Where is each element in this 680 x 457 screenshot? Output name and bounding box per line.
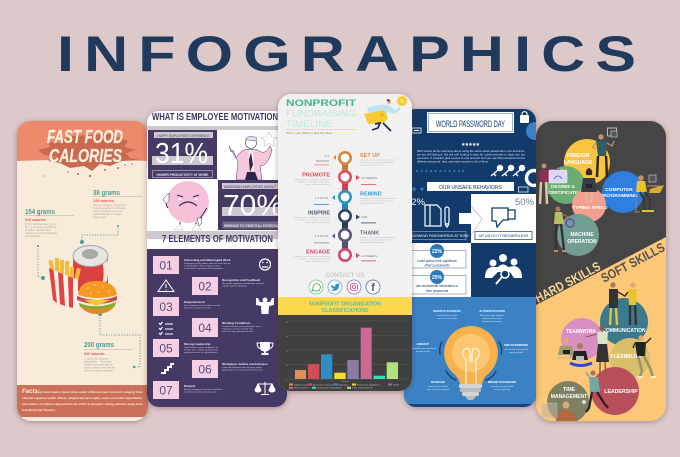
step: engage: Integrate your social presentations to bbox=[294, 255, 331, 258]
stat: 200 grams: saturated fat... The burger bbox=[84, 360, 112, 364]
blue section: password tips: Enter your login together bbox=[480, 314, 504, 317]
caption box left: KNOWING PASSWORDS AT RISK bbox=[409, 234, 469, 238]
step: set up: complete social media and charity bbox=[360, 161, 394, 164]
icon: muscle figure bbox=[256, 298, 274, 314]
white panel: 22% and 25% stats bbox=[404, 243, 471, 297]
white panel: 22% and 25% stats: use sentimental information in bbox=[416, 284, 458, 288]
step: thank: THANK bbox=[360, 230, 379, 236]
small tag bbox=[412, 128, 421, 133]
blue section: password tips: REMOTE SOURCES bbox=[433, 309, 461, 313]
stat block: 31%: 31% bbox=[155, 138, 208, 170]
list: 7 elements: is meaningful to them and gives them bbox=[184, 264, 220, 268]
stat: 42%: 42% bbox=[406, 197, 426, 208]
stat block: 70%: 70% bbox=[223, 190, 283, 222]
heading: FAST FOOD bbox=[47, 127, 123, 147]
title box bbox=[427, 112, 514, 133]
person: programmer at desk bbox=[634, 175, 664, 212]
stat: 38 grams: 310 mg of sodium, 0 grams fat, bbox=[93, 204, 126, 207]
step: inspire: page. Add social network bbox=[306, 221, 331, 224]
label: hard skills: HARD SKILLS bbox=[532, 258, 603, 306]
blue section: password tips: to keep it safe bbox=[416, 350, 431, 353]
skill: foreign language: LANGUAGE bbox=[564, 160, 593, 166]
dot row bbox=[412, 170, 464, 191]
skill: flexibility bbox=[610, 338, 650, 378]
skill: flexibility: FLEXIBILITY bbox=[610, 354, 642, 360]
arrow bbox=[459, 206, 482, 235]
paragraph: we are still doing it. We are still making it easy for cybercriminals to hack into our bbox=[417, 152, 525, 156]
list: 7 elements: a real sense of purpose and contribution bbox=[184, 267, 224, 270]
skill: typing speed bbox=[572, 188, 608, 222]
panel: soft and hard skills bbox=[532, 121, 667, 423]
chart legend: Education bbox=[339, 383, 348, 386]
chart legend: Human Services bbox=[294, 388, 309, 390]
subheading bbox=[147, 231, 278, 242]
stat: 200 grams: weighs two pounds and the bbox=[84, 364, 114, 366]
list: 7 elements: regular, specific feedback bbox=[222, 284, 248, 288]
stat block: 31% bbox=[148, 130, 217, 179]
heading: WHAT IS EMPLOYEE MOTIVATION bbox=[152, 112, 278, 123]
skill: machine operation: MACHINE bbox=[570, 232, 594, 238]
icon: fries bbox=[48, 258, 81, 309]
step: thank: complete social media and charity bbox=[360, 238, 394, 242]
blue section: password tips: AUTHENTICATION bbox=[479, 309, 505, 313]
small tag bbox=[518, 187, 528, 192]
list: 7 elements: work and stay motivated at work bbox=[222, 330, 254, 333]
skill: leadership: LEADERSHIP bbox=[604, 389, 638, 395]
panel: nonprofit fundraising timeline bbox=[278, 94, 412, 391]
icon: lock bbox=[520, 112, 529, 123]
caption box right: UP US DO IT REGARDLESS bbox=[479, 234, 529, 238]
list: 7 elements: to achieve shared company goals bbox=[184, 390, 217, 394]
title box: WORLD PASSWORD DAY bbox=[436, 119, 505, 129]
skill: time management: MANAGEMENT bbox=[551, 394, 587, 400]
list: 7 elements: Employees work hardest when the work they do bbox=[184, 262, 231, 265]
panel: fast food calories bbox=[17, 121, 148, 421]
skill: degree and certificate: DEGREE & bbox=[551, 184, 576, 189]
list: 7 elements: 06 bbox=[198, 362, 212, 376]
icon: checklist bbox=[159, 322, 173, 334]
illustration: happy worker with star bbox=[229, 132, 277, 180]
step: set up: SET UP bbox=[360, 153, 380, 159]
list: 7 elements: Reward bbox=[184, 384, 195, 388]
stat block: 70%: WORKING TO THEIR FULL POTENTIAL bbox=[224, 223, 280, 228]
icon: trophy bbox=[257, 342, 273, 355]
blue section: password tips: password safe bbox=[509, 351, 524, 354]
bar chart: 0 bbox=[286, 380, 287, 382]
step: thank: page. Add social network bbox=[360, 241, 385, 244]
step: promote: PROMOTE bbox=[302, 172, 330, 178]
skill: computer programming: PROGRAMMING bbox=[600, 193, 638, 199]
step: set up: MONTHS bbox=[316, 159, 329, 163]
chart legend: Health bbox=[393, 383, 399, 386]
contact heading: CONTACT US bbox=[326, 273, 364, 279]
skill: computer programming: COMPUTER bbox=[605, 187, 633, 193]
stat: 38 grams bbox=[93, 188, 142, 219]
bar chart: 40 bbox=[286, 322, 288, 324]
list: 7 elements bbox=[147, 249, 287, 407]
step: inspire: Integrate your social presentations to bbox=[294, 216, 331, 219]
facts band: and claims of cultural degradation via shifts in people's eating patterns away from bbox=[22, 402, 143, 406]
caption box left bbox=[409, 232, 469, 240]
step: remind bbox=[314, 192, 397, 205]
bar chart: 20 bbox=[286, 350, 288, 352]
stat: 154 grams: 510 calories bbox=[25, 218, 46, 222]
stat block: 31%: HAPPY EMPLOYEES EXPERIENCE bbox=[158, 133, 210, 138]
person: typist bbox=[581, 168, 597, 203]
person: graduate with certificate bbox=[539, 164, 567, 204]
person: flexible worker bbox=[633, 335, 656, 377]
icon: notebook and pen bbox=[425, 205, 449, 227]
label: soft skills: SOFT SKILLS bbox=[598, 239, 667, 286]
paragraph: accounts. If a hacker gets access to one account and you use that password across bbox=[417, 156, 526, 160]
social icons: f bbox=[371, 282, 375, 294]
step: remind: complete social media and charity bbox=[360, 200, 394, 202]
skill: foreign language bbox=[564, 139, 610, 185]
skill: degree and certificate bbox=[547, 166, 585, 204]
heading: FUNDRAISING bbox=[286, 108, 356, 120]
step: thank bbox=[314, 230, 397, 244]
stat: 154 grams: fat, 7 g of protein and 350 mg bbox=[25, 226, 57, 229]
list: 7 elements: guiding teams in the right direction bbox=[184, 351, 218, 354]
person: machine operator bbox=[554, 206, 574, 251]
step: engage: complete social media and charity bbox=[297, 258, 331, 260]
subheading box bbox=[427, 182, 514, 191]
step: set up: 2-3 bbox=[325, 154, 329, 158]
blue section: password tips: STORAGE bbox=[431, 380, 445, 384]
icon: people with magnifier bbox=[485, 254, 522, 284]
rating stars: ★★★★★ bbox=[461, 142, 481, 148]
panel: employee motivation bbox=[147, 111, 287, 407]
blue section: password tips: BRAND PASSWORD bbox=[488, 380, 516, 384]
step: remind: 1-7 DAYS bbox=[315, 196, 328, 200]
step: inspire bbox=[294, 210, 376, 224]
stat: 154 grams: 66 g of carbohydrates, 24 g of bbox=[25, 223, 57, 226]
list: 7 elements: Empowerment bbox=[184, 300, 205, 304]
person: foreign language speaker bbox=[592, 128, 617, 177]
blue section: password tips: store the passwords bbox=[428, 385, 449, 388]
stat: 154 grams: 154 grams bbox=[25, 207, 55, 216]
stat: 154 grams: criticized french fries for being bbox=[25, 232, 57, 235]
illustration: running man with folder bbox=[364, 96, 407, 131]
blue section: password tips: and update your password bbox=[410, 347, 437, 350]
step: promote: Integrate your social presentations to bbox=[294, 178, 331, 181]
list: 7 elements: 05 bbox=[159, 342, 173, 356]
stat block: 70%: AMERICAN EMPLOYEES AREN'T bbox=[224, 184, 276, 189]
list: 7 elements: Provide the tools and comfortable space bbox=[222, 325, 262, 328]
bar chart: 10 bbox=[286, 365, 288, 367]
step: remind: Integrate your social presentations to bbox=[360, 197, 397, 200]
blue section: password tips: change your password bbox=[491, 385, 514, 388]
stat: 200 grams: 27 grams fat, 10 grams bbox=[84, 358, 109, 360]
skill: teamwork bbox=[561, 318, 603, 360]
skill: communication: COMMUNICATION bbox=[602, 328, 646, 334]
facts band: Facts: bbox=[22, 389, 40, 395]
bar chart: 30 bbox=[286, 336, 288, 338]
icon: thumbs down bbox=[492, 208, 515, 227]
stat: 200 grams: 200 grams bbox=[84, 340, 114, 349]
skill: machine operation bbox=[557, 214, 599, 256]
list: 7 elements: Workplace Justice and Fairness bbox=[222, 362, 268, 366]
step: promote: page. Add social network bbox=[306, 183, 331, 186]
skill: foreign language: FOREIGN bbox=[567, 153, 590, 159]
blue section: password tips: LIBRARY bbox=[417, 342, 429, 346]
icon: scales bbox=[255, 382, 275, 394]
icon: burger bbox=[77, 281, 117, 314]
skill: machine operation: OPERATION bbox=[567, 239, 597, 245]
chart legend bbox=[289, 383, 399, 390]
step: promote bbox=[294, 172, 377, 186]
person: time manager bbox=[541, 400, 586, 421]
stat: 38 grams: 140 calories bbox=[93, 199, 114, 203]
stat block: 70% bbox=[218, 180, 278, 230]
step: inspire: LIVE bbox=[361, 215, 368, 219]
icon: light bulb bbox=[440, 326, 502, 400]
stat: 200 grams: 540 calories bbox=[84, 352, 105, 356]
stat: 154 grams bbox=[25, 207, 74, 238]
chart legend: Public, Societal Benefit bbox=[352, 387, 373, 390]
skill: teamwork: TEAMWORK bbox=[566, 329, 596, 335]
skill: communication bbox=[600, 298, 648, 346]
illustration: sad face bbox=[162, 181, 209, 230]
bar chart: Categories bbox=[341, 380, 349, 383]
list: 7 elements: 03 bbox=[159, 300, 173, 314]
yellow banner bbox=[278, 297, 412, 315]
stat: 154 grams: of sodium. Experts have bbox=[25, 229, 51, 232]
white panel: 22% and 25% stats: 22% bbox=[432, 249, 443, 255]
blue section: password tips: your secure or optional bbox=[427, 388, 450, 391]
person: leader walking bbox=[586, 370, 608, 412]
icon: keys bbox=[491, 165, 525, 176]
blue section: password tips: with password token bbox=[482, 317, 503, 320]
stat: 154 grams: very unhealthy bbox=[25, 235, 41, 238]
facts band bbox=[17, 385, 148, 417]
stat: 200 grams bbox=[84, 340, 133, 372]
list: 7 elements: opportunities to every member of the team bbox=[222, 368, 263, 372]
list: 7 elements: Interesting and Meaningful Work bbox=[184, 258, 231, 262]
step: engage: page. Add social network bbox=[306, 260, 331, 263]
dark half bbox=[536, 121, 666, 305]
timeline spine bbox=[342, 158, 348, 255]
list: 7 elements: Reward employees for their contribution bbox=[184, 388, 223, 391]
dotted connectors bbox=[38, 226, 140, 367]
stat: 38 grams: drug cocaine bbox=[93, 216, 107, 219]
icon: warning triangle bbox=[158, 280, 174, 292]
step: set up bbox=[314, 153, 397, 166]
white panel: 50% bbox=[471, 194, 536, 243]
facts band: Fast food chains have come under criticism over concerns ranging from bbox=[36, 390, 143, 394]
step: promote: complete social media and charity bbox=[297, 180, 331, 184]
step: remind: page. Add social network bbox=[360, 202, 385, 205]
skill: leadership bbox=[591, 367, 639, 415]
blue section: password tips: keeping data secure bbox=[482, 320, 503, 323]
stat: 38 grams: 0 grams potassium: a common bbox=[93, 207, 126, 210]
step: engage: ENGAGE bbox=[306, 250, 330, 256]
list: 7 elements: Strong Leadership bbox=[184, 342, 211, 346]
paragraph bbox=[417, 149, 526, 164]
step: inspire: INSPIRE bbox=[308, 210, 330, 216]
panel: world password day bbox=[404, 109, 544, 407]
step: engage: 1-2 WEEKS bbox=[361, 254, 377, 258]
people: handshake bbox=[609, 282, 637, 325]
heading bbox=[47, 130, 123, 162]
person: presenter bbox=[586, 325, 609, 375]
list: 7 elements: 02 bbox=[198, 280, 212, 294]
list: 7 elements: Treat all employees fairly and give equal bbox=[222, 366, 262, 369]
skill: computer programming bbox=[600, 171, 644, 213]
white panel: 22% and 25% stats: other's passwords bbox=[424, 264, 450, 268]
icon: soda can bbox=[73, 246, 108, 294]
paragraph: With thanks all the warnings about using the same weak passwords in our accounts, bbox=[417, 149, 525, 153]
caption box right bbox=[475, 232, 532, 240]
white panel: 50%: 50% bbox=[515, 197, 535, 208]
icon: face bbox=[260, 259, 270, 270]
list: 7 elements: Recognize employee contributions and give bbox=[222, 282, 265, 285]
skill: degree and certificate: CERTIFICATE bbox=[548, 190, 578, 195]
chart legend: Religion Groups bbox=[294, 384, 308, 386]
step: promote: 4-6 WEEKS bbox=[361, 176, 377, 180]
tagline: Give to your charity to help the cause bbox=[286, 131, 333, 135]
stat: 200 grams: sauce is derived from the fact bbox=[84, 366, 116, 370]
blue section: password tips: source or third party bbox=[437, 317, 458, 320]
blue section: password tips: every single day bbox=[494, 388, 511, 391]
chart legend: International, Foreign Affairs bbox=[317, 387, 342, 390]
stat block: 31%: HIGHER PRODUCTIVITY AT WORK bbox=[156, 172, 209, 177]
facts band: traditional foods. bbox=[22, 408, 56, 412]
yellow banner: CLASSIFICATIONS bbox=[322, 308, 369, 314]
stat: 200 grams: that the burger is unhealthy bbox=[84, 370, 114, 372]
heading: TIMELINE bbox=[286, 119, 332, 130]
blue section: password tips: WIFI PASSWORD bbox=[504, 343, 528, 347]
stat: 38 grams: relationship with the illegal bbox=[93, 213, 121, 216]
step: remind: REMIND bbox=[360, 192, 382, 198]
people: team on laptops bbox=[557, 338, 592, 366]
stat: 38 grams: theme of criticism due to the bbox=[93, 210, 124, 213]
header band bbox=[17, 121, 148, 163]
paint splat bbox=[38, 134, 140, 171]
chart legend: Environment and Animals bbox=[357, 383, 380, 386]
list: 7 elements: decisions on their own work bbox=[184, 306, 212, 310]
list: 7 elements: Working Conditions bbox=[222, 321, 251, 325]
skill: time management: TIME bbox=[563, 387, 576, 393]
list: 7 elements: Good leaders inspire employees to bbox=[184, 346, 219, 349]
social icons bbox=[309, 280, 380, 294]
step: engage bbox=[294, 250, 377, 263]
bar chart bbox=[278, 315, 412, 391]
step: thank: Integrate your social presentations to bbox=[360, 236, 397, 239]
list: 7 elements: employees need to do their best bbox=[222, 328, 254, 330]
decoration: ring bbox=[526, 170, 542, 186]
stat: 38 grams: 38 grams bbox=[93, 188, 120, 197]
blue section: password tips: password any remote bbox=[437, 314, 458, 317]
white panel: 22% and 25% stats: their passwords bbox=[426, 289, 449, 293]
yellow banner: NONPROFIT ORGANIZATION bbox=[309, 302, 381, 308]
heading: NONPROFIT bbox=[286, 98, 356, 109]
heading bbox=[286, 98, 356, 130]
list: 7 elements: 01 bbox=[159, 258, 173, 272]
list: 7 elements: Recognition and Feedback bbox=[222, 278, 261, 282]
subheading box: OUR UNSAFE BEHAVIORS bbox=[439, 185, 503, 191]
step: inspire: complete social media and charity bbox=[297, 218, 331, 222]
skill: typing speed: TYPING SPEED bbox=[572, 205, 608, 211]
blue section: password tips: use secure key to guard bbox=[504, 348, 528, 351]
heading: CALORIES bbox=[49, 146, 122, 166]
facts band: claimed negative health effects, alleged animal cruelty, cases of worker exploitation, bbox=[22, 396, 143, 400]
list: 7 elements: Give employees the freedom to make bbox=[184, 304, 221, 307]
white panel: 22% and 25% stats: 25% bbox=[432, 275, 443, 281]
skill: time management bbox=[547, 381, 589, 423]
blue section: password tips bbox=[404, 297, 536, 407]
icon: stairs bbox=[161, 364, 174, 373]
title: INFOGRAPHICS bbox=[57, 26, 646, 82]
step: thank: 1-3 DAYS bbox=[315, 234, 328, 238]
subheading: 7 ELEMENTS OF MOTIVATION bbox=[162, 234, 273, 245]
list: 7 elements: 04 bbox=[198, 321, 212, 335]
step: set up: Integrate your social presentations to bbox=[360, 158, 397, 162]
blue circle decoration bbox=[526, 122, 544, 140]
list: 7 elements: 07 bbox=[159, 384, 173, 398]
paragraph: different accounts, they now have access to all of them. bbox=[417, 160, 489, 164]
chart legend: Arts, Culture, Humanities bbox=[313, 383, 335, 386]
white panel: 22% and 25% stats: could guess their significant bbox=[417, 259, 457, 263]
timeline nodes bbox=[339, 152, 351, 261]
step: set up: page. Add social network bbox=[360, 164, 385, 166]
list: 7 elements: do their best, setting standards and bbox=[184, 348, 219, 352]
